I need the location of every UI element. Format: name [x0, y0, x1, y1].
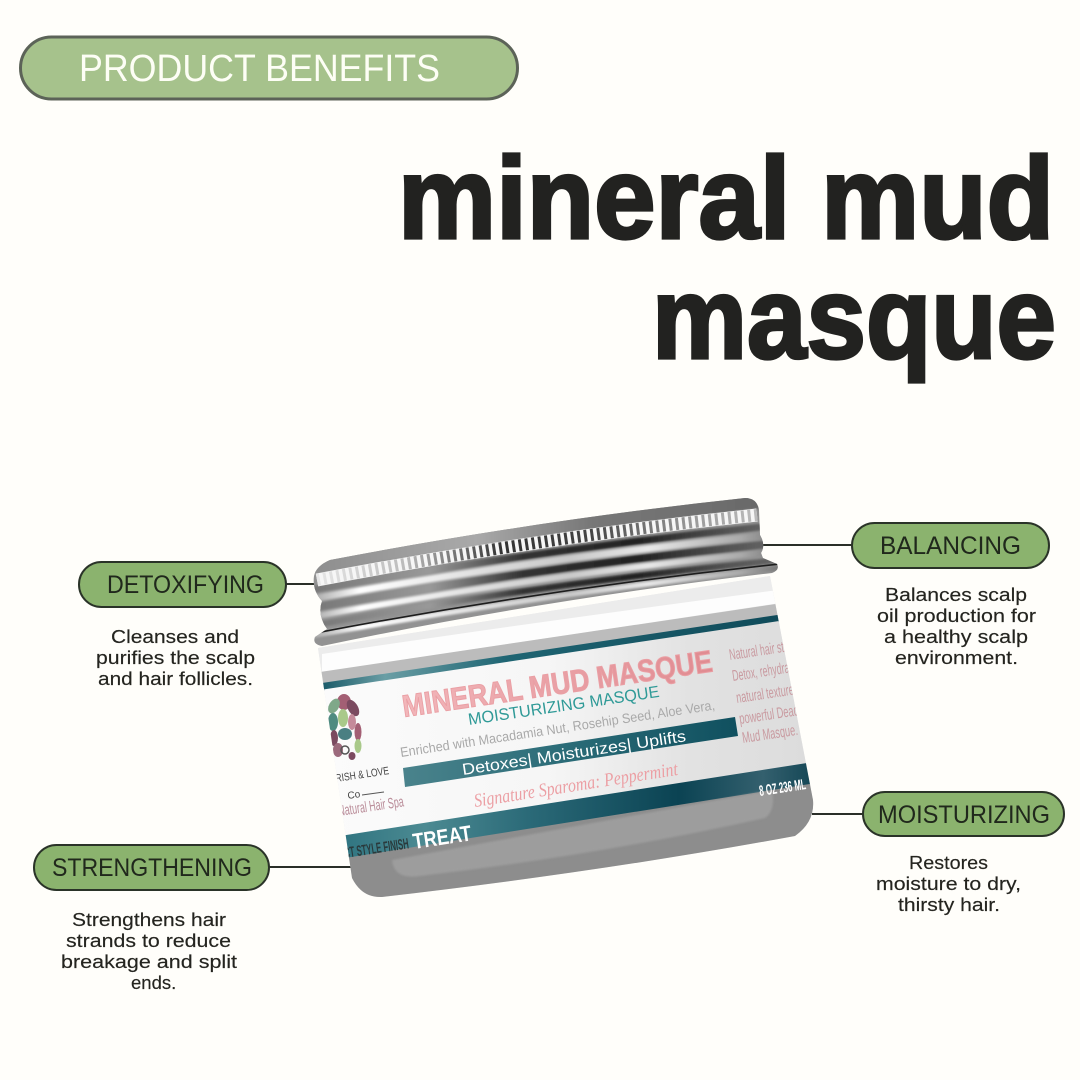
side paragraph: powerful Dead — [738, 702, 800, 728]
gray band — [320, 603, 785, 688]
bar text: Detoxes| Moisturizes| Uplifts — [461, 728, 687, 779]
benefit: detoxifying: Cleanses and — [111, 626, 239, 647]
benefit: strengthening: breakage and split — [61, 951, 237, 972]
base highlight — [392, 790, 773, 877]
benefit: strengthening: ends. — [131, 972, 176, 993]
benefit: balancing: oil production for — [877, 605, 1036, 626]
benefit: detoxifying — [79, 562, 286, 689]
subtitle: MOISTURIZING MASQUE — [467, 683, 661, 729]
benefit: moisturizing: Restores — [909, 852, 988, 873]
teal stripe — [322, 614, 786, 691]
jar base — [345, 783, 816, 905]
brand text: RISH & LOVE — [335, 765, 390, 785]
side paragraph: Detox, rehydrat — [731, 659, 793, 685]
jar body — [316, 570, 816, 905]
label text — [326, 638, 807, 862]
benefit: strengthening: STRENGTHENING — [52, 854, 252, 882]
benefit: balancing — [852, 523, 1049, 668]
lid — [300, 498, 780, 646]
finish text: CT STYLE FINISH — [343, 835, 410, 862]
knurled band — [317, 515, 757, 580]
benefit: moisturizing — [863, 792, 1064, 915]
side paragraph: natural texture — [735, 682, 795, 707]
white label — [320, 620, 812, 838]
badge: product benefits — [20, 37, 518, 99]
badge: product benefits: PRODUCT BENEFITS — [79, 48, 440, 90]
product name: MINERAL MUD MASQUE — [400, 644, 715, 724]
benefit: balancing: environment. — [895, 647, 1018, 668]
benefit: detoxifying: DETOXIFYING — [107, 571, 264, 599]
title — [398, 133, 1056, 383]
benefit: balancing: BALANCING — [880, 532, 1021, 560]
connector lines — [269, 545, 863, 867]
title: mineral mud — [398, 133, 1054, 263]
side paragraph — [729, 642, 798, 743]
benefit: detoxifying: and hair follicles. — [98, 668, 253, 689]
ingredients: Enriched with Macadamia Nut, Rosehip Seed, Aloe Vera, — [399, 698, 716, 760]
scent: Signature Sparoma: Peppermint — [472, 759, 680, 812]
benefit: balancing: a healthy scalp — [884, 626, 1028, 647]
side paragraph: Natural hair sto — [728, 638, 790, 664]
brand text: Natural Hair Spa — [337, 793, 405, 820]
benefit: moisturizing: thirsty hair. — [898, 894, 1000, 915]
benefit: balancing: Balances scalp — [885, 584, 1027, 605]
glass neck — [316, 570, 782, 676]
benefit: strengthening: Strengthens hair — [72, 909, 226, 930]
benefit: detoxifying: purifies the scalp — [96, 647, 255, 668]
treat: TREAT — [411, 820, 474, 854]
benefit: strengthening: strands to reduce — [66, 930, 231, 951]
brand text — [336, 766, 404, 816]
teal bar — [403, 717, 738, 787]
brand text: Co — [347, 789, 362, 802]
product jar — [300, 498, 816, 905]
size: 8 OZ 236 ML — [758, 776, 807, 800]
benefit: strengthening — [34, 845, 269, 993]
logo — [326, 694, 362, 760]
side paragraph: Mud Masque. — [741, 722, 799, 747]
benefit: moisturizing: moisture to dry, — [876, 873, 1021, 894]
benefit: moisturizing: MOISTURIZING — [878, 801, 1050, 829]
teal bottom band — [340, 763, 816, 859]
title: masque — [652, 253, 1056, 383]
